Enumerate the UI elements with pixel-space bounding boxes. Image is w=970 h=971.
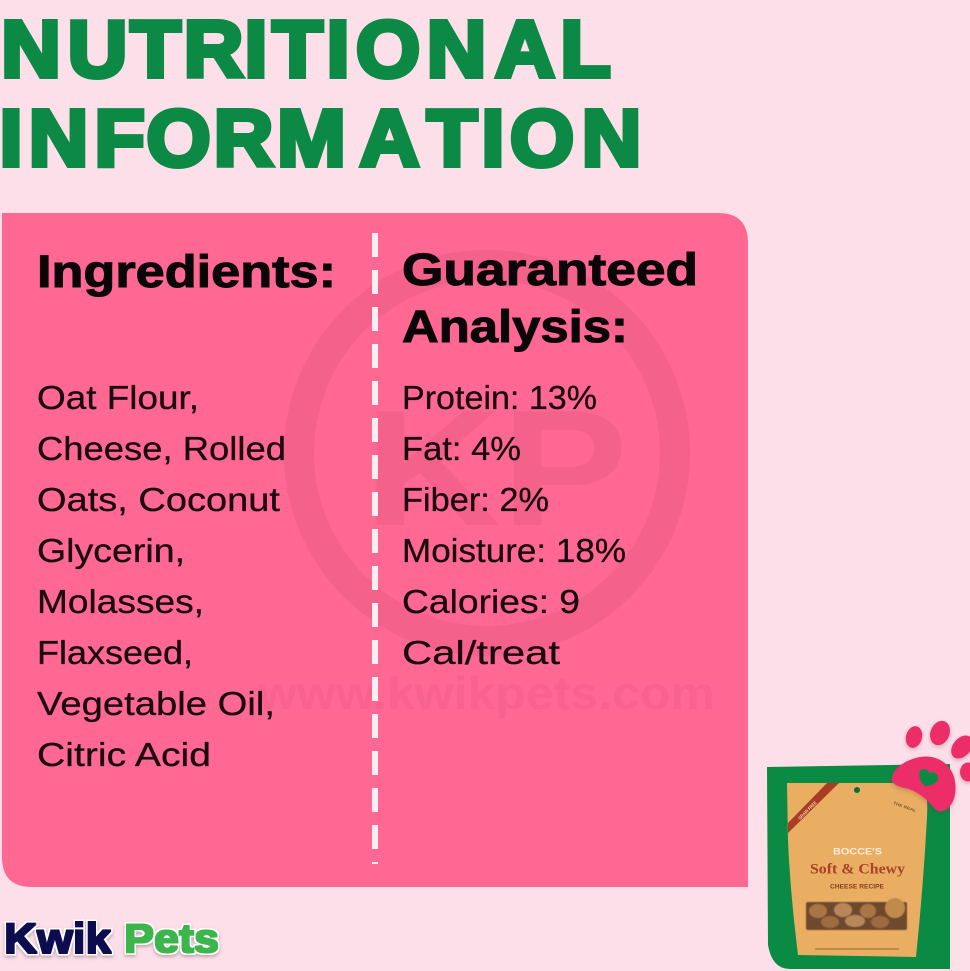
guaranteed analysis list: Moisture: 18% bbox=[402, 533, 626, 570]
title bbox=[0, 5, 641, 183]
guaranteed analysis list: Calories: 9 bbox=[402, 584, 580, 621]
product name: Soft & Chewy bbox=[810, 862, 906, 878]
ingredients list: Oat Flour, bbox=[37, 380, 199, 417]
ingredients list: Flaxseed, bbox=[37, 635, 193, 672]
watermark: KP logo bbox=[299, 265, 675, 641]
dashed divider bbox=[372, 233, 378, 864]
pouch footer bbox=[815, 948, 899, 950]
logo: Kwik Pets: Kwik bbox=[4, 915, 111, 963]
title: NUTRITIONAL bbox=[1, 5, 611, 94]
title: INFORMATION bbox=[0, 94, 641, 183]
guaranteed analysis list: Protein: 13% bbox=[402, 380, 597, 417]
heading: guaranteed analysis: Analysis: bbox=[402, 301, 628, 352]
ingredients list: Glycerin, bbox=[37, 533, 185, 570]
logo: Kwik Pets: Pets bbox=[124, 917, 219, 961]
treat window bbox=[806, 898, 907, 930]
brand name: BOCCE'S bbox=[833, 846, 882, 856]
guaranteed analysis list: Fat: 4% bbox=[402, 431, 521, 468]
guaranteed analysis list bbox=[402, 380, 626, 672]
ingredients list: Vegetable Oil, bbox=[37, 686, 275, 723]
ribbon label: GRAIN FREE bbox=[797, 800, 818, 821]
panel: nutrition card bbox=[2, 213, 748, 887]
guaranteed analysis list: Cal/treat bbox=[402, 635, 561, 672]
heading: ingredients: Ingredients: bbox=[37, 246, 336, 297]
heading: guaranteed analysis bbox=[402, 244, 698, 352]
pouch ribbon bbox=[788, 783, 839, 833]
heart cutout bbox=[919, 769, 938, 786]
recipe label: CHEESE RECIPE bbox=[830, 884, 885, 890]
guaranteed analysis list: Fiber: 2% bbox=[402, 482, 549, 519]
icon: paw bbox=[892, 718, 970, 811]
hang hole bbox=[854, 787, 860, 793]
logo: Kwik Pets bbox=[4, 915, 219, 963]
watermark: website: www.kwikpets.com bbox=[257, 667, 715, 719]
ingredients list: Oats, Coconut bbox=[37, 482, 281, 519]
watermark: KP logo: KP bbox=[364, 376, 628, 560]
ingredients list: Cheese, Rolled bbox=[37, 431, 286, 468]
heading: guaranteed analysis: Guaranteed bbox=[402, 244, 698, 295]
ingredients list: Citric Acid bbox=[37, 737, 211, 774]
ingredients list bbox=[37, 380, 286, 774]
product pouch bbox=[787, 783, 927, 957]
green backing bbox=[767, 764, 950, 969]
product card bbox=[767, 718, 970, 969]
badge bbox=[885, 898, 905, 918]
ingredients list: Molasses, bbox=[37, 584, 204, 621]
seal text: THE REAL bbox=[893, 800, 918, 813]
